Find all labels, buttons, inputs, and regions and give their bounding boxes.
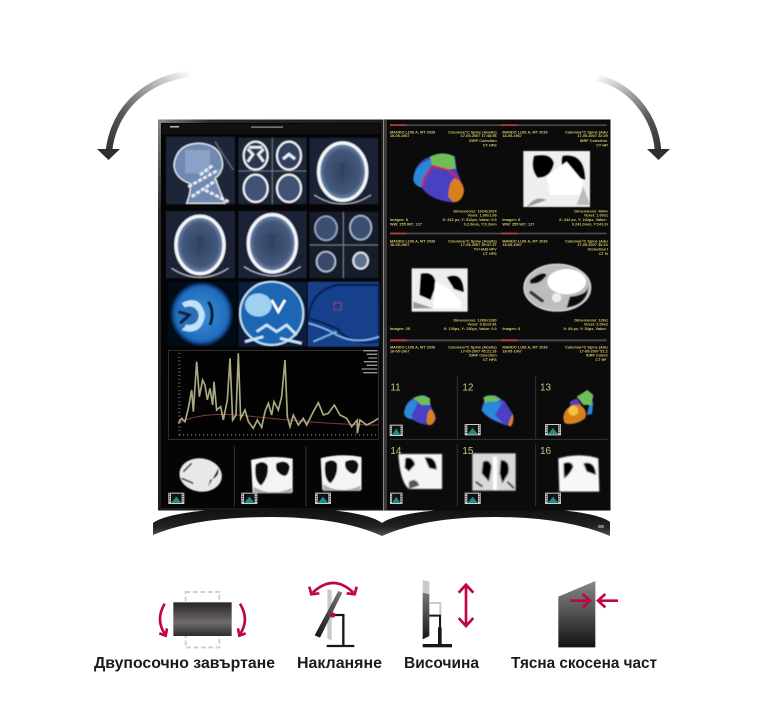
MRI sagittal [308,282,379,347]
thumbnail numbers: 12 [462,382,474,393]
MRI axial with lesion [167,282,237,347]
lower viewer cells [390,345,614,506]
left monitor [158,120,384,510]
patient captions: iColection IHF [588,248,614,252]
right monitor stand [382,510,610,536]
patient captions: Dimensions: 1024x1024 [453,210,498,214]
right monitor [384,120,614,510]
patient captions: WW: 255 WC: 127 [390,222,422,226]
sagittal skull scan [166,137,235,204]
chest thumbnail two [251,457,293,493]
patient captions: Dimensions: 128x128 [574,319,614,323]
header bar [162,124,380,134]
icon: tilt [309,583,357,646]
thumbnail numbers: 14 [390,446,402,457]
thumbnail numbers: 13 [540,382,552,393]
cell captions: Columna^C Spine (Adults) [565,345,614,349]
chest coronal scan [523,151,590,207]
patient captions: CT HFS [596,143,610,147]
patient captions: Imagen: 8 [390,218,409,222]
label: height: Височина [404,655,479,672]
icon: narrow bezel [558,581,618,647]
3D heart [413,153,464,202]
chest thumbnail three [321,455,361,491]
four axial slices [238,138,307,204]
heart thumbnail 11 [404,395,436,425]
cell captions: iDRF Colection [586,354,614,358]
cell captions: CT HFS [483,358,497,362]
left monitor stand [153,510,382,536]
icon: pivot rotation [159,592,246,647]
patient captions: 0.241.0mm, Y:241.0m [572,222,611,226]
spectrum chart [168,351,378,439]
patient captions: TV+IAEI+IPV [474,248,497,252]
cell captions: 18-05-1967 [390,349,410,353]
patient captions: Voxel: 1.00x1.00 [584,214,613,218]
thumbnail numbers: 11 [390,382,401,393]
cell captions: MANDO LUIS A, MT 2039 [502,345,548,349]
film icons [390,424,561,504]
cell captions: MANDO LUIS A, MT 2039 [390,345,435,349]
patient captions: 18-05-1967 [502,134,522,138]
thumbnail numbers: 15 [462,446,474,457]
patient captions: Voxel: 1.00x1.00 [467,214,497,218]
patient captions: CT HFS [483,252,497,256]
axial CT top right [309,138,378,204]
small CT grid [309,212,378,278]
thumbnail numbers [390,382,552,457]
patient captions: Columna^C Spine (Adults) [565,239,614,243]
patient captions [390,130,614,331]
medical scans [166,137,379,347]
cell captions: iDRF Colection [469,354,497,358]
patient captions: Dimensions: 484x484 [574,210,614,214]
patient captions: MANDO LUIS A, MT 2039 [390,130,435,134]
patient captions: Voxel: 2.00x2.00 [584,323,613,327]
chest thumbnails row [398,453,599,492]
axial CT row two [166,211,307,278]
patient captions: 17-05-2007 17:48:56 [461,134,497,138]
patient captions: CT HFS [483,143,497,147]
MRI coronal [238,282,307,347]
arrow: rotate right [597,78,670,160]
cell captions: Columna^C Spine (Adults) [448,345,497,349]
chest axial thumbnail [177,456,224,494]
icon: height adjustment [423,580,473,647]
bezel [158,120,384,510]
patient captions: Imagen: 8 [502,218,521,222]
patient captions: MANDO LUIS A, MT 2039 [502,239,548,243]
patient captions: Dimensions: 1280x1280 [453,319,497,323]
patient captions: 17-05-2007 40:24:51 [577,243,614,247]
patient captions: iDRF Colection [469,139,497,143]
patient captions: X: 130px, Y: 130px, Value: 0.0 [444,327,497,331]
cell captions: 17-05-2007 51:21:8 [579,349,614,353]
cell captions: 17-05-2007 45:21:26 [461,349,497,353]
patient captions: 18-05-1967 [502,243,522,247]
heart thumbnail 12 [482,395,513,427]
cell captions: CT HF [595,358,607,362]
chest axial scan [524,264,591,311]
label: narrow bezel: Тясна скосена част [511,655,657,672]
patient captions: X: 242 px, Y: 242px, Value: 0 [559,218,610,222]
heart thumbnail 13 [563,390,593,424]
patient captions: Columna^C Spine (Adults) [448,130,497,134]
cell captions: 18-05-1967 [502,349,522,353]
patient captions: 18-05-1967 [390,243,410,247]
patient captions: Columna^C Spine (Adults) [448,239,497,243]
patient captions: MANDO LUIS A, MT 2039 [390,239,435,243]
patient captions: 0.2.0mm, Y:0.2mm [464,222,497,226]
chest coronal scan two [412,268,468,312]
patient captions: Imagen: 25 [390,327,411,331]
thumbnail numbers: 16 [540,446,552,457]
patient captions: 18-05-1967 [390,134,410,138]
thumbnail grid lines [390,376,607,506]
patient captions: 17-05-2007 22:29:15 [577,134,614,138]
label: pivot: Двупосочно завъртане [94,655,275,672]
patient captions: 17-05-2007 39:37:37 [461,243,497,247]
status bars [390,124,607,341]
patient captions: WW: 255 WC: 127 [502,222,534,226]
patient captions: Voxel: 0.81x0.81 [467,323,498,327]
upper viewer cells [390,124,614,341]
patient captions: MANDO LUIS A, MT 2039 [502,130,548,134]
patient captions: Imagen: 8 [502,327,521,331]
patient captions: iDRF Colection HF [580,139,614,143]
bottom chest thumbnails [168,447,361,507]
arrow: rotate left [97,74,190,160]
bezel [384,120,610,510]
film icons [168,493,331,504]
patient captions: CT HF [599,252,611,256]
patient captions: X: 512 px, Y: 512px, Value: 0.0 [443,218,497,222]
patient captions: Columna^C Spine (Adults) [565,130,614,134]
patient captions: X: 84 px, Y: 54px, Value: 0 [563,327,610,331]
label: tilt: Накланяне [297,655,382,672]
cell captions [390,345,614,362]
